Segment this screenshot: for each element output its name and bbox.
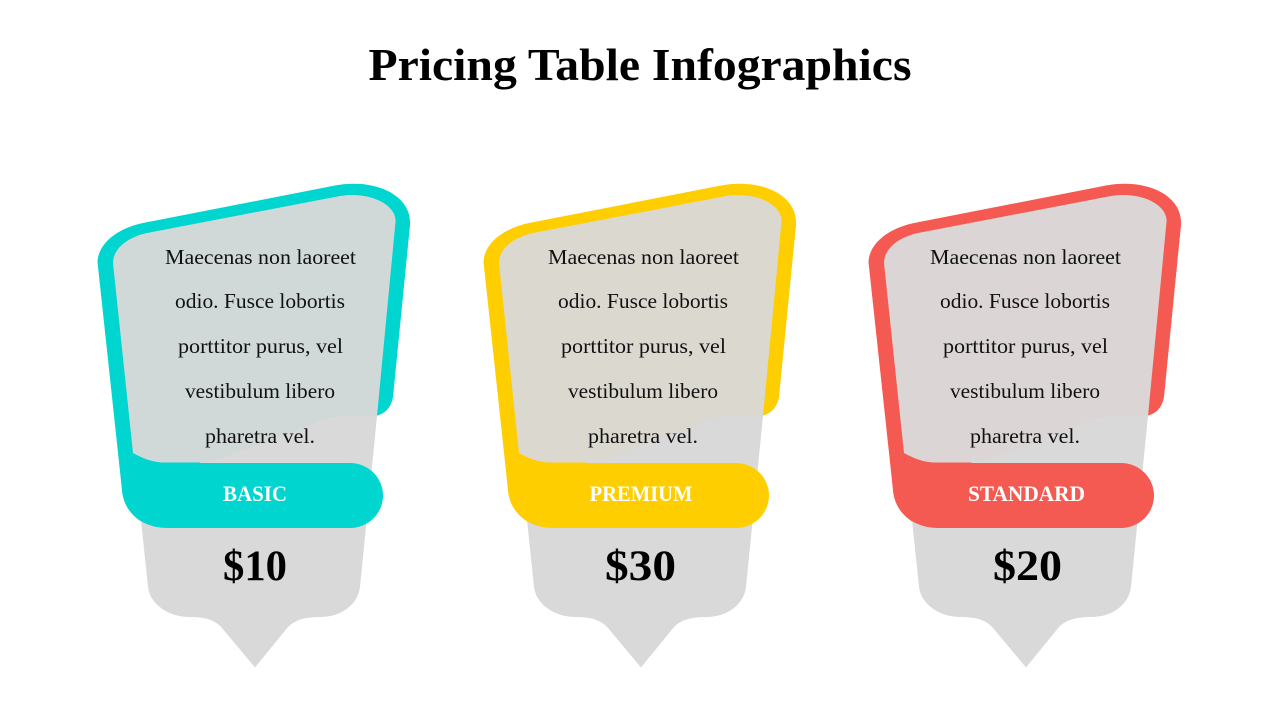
description: basic: vestibulum libero [185,379,335,403]
ribbon: basic [120,463,383,528]
plan name: standard: STANDARD [968,481,1085,506]
description: basic: pharetra vel. [205,424,315,448]
description background: premium [499,195,782,462]
description: premium: Maecenas non laoreet [548,245,739,269]
description: premium: pharetra vel. [588,424,698,448]
description: premium [548,245,739,448]
plan name: premium: PREMIUM [590,481,693,506]
description background: standard [884,195,1167,462]
description: premium: odio. Fusce lobortis [558,289,728,313]
plan name: basic: BASIC [223,481,287,506]
description: standard: Maecenas non laoreet [930,245,1121,269]
price: standard: $20 [993,543,1062,590]
description: premium: porttitor purus, vel [561,334,726,358]
card pointer body: standard [912,410,1148,668]
card pointer body: basic [141,410,377,668]
price: basic: $10 [223,543,287,590]
panel: premium plan [484,184,796,667]
ribbon: premium [506,463,769,528]
card pointer body: premium [527,410,763,668]
description background: basic [113,195,396,462]
card frame: premium [484,184,796,528]
description: standard: pharetra vel. [970,424,1080,448]
description: standard: porttitor purus, vel [943,334,1108,358]
description: standard [930,245,1121,448]
description: premium: vestibulum libero [568,379,718,403]
description: standard: vestibulum libero [950,379,1100,403]
description: basic: porttitor purus, vel [178,334,343,358]
price: premium: $30 [605,543,676,590]
card frame: standard [868,184,1181,528]
panel: standard plan [868,184,1181,667]
description: basic: Maecenas non laoreet [165,245,356,269]
title: Pricing Table Infographics [368,39,912,90]
card frame: basic [98,184,410,528]
ribbon: standard [891,463,1154,528]
panel: basic plan [98,184,410,667]
description: basic: odio. Fusce lobortis [175,289,345,313]
description: standard: odio. Fusce lobortis [940,289,1110,313]
description: basic [165,245,356,448]
